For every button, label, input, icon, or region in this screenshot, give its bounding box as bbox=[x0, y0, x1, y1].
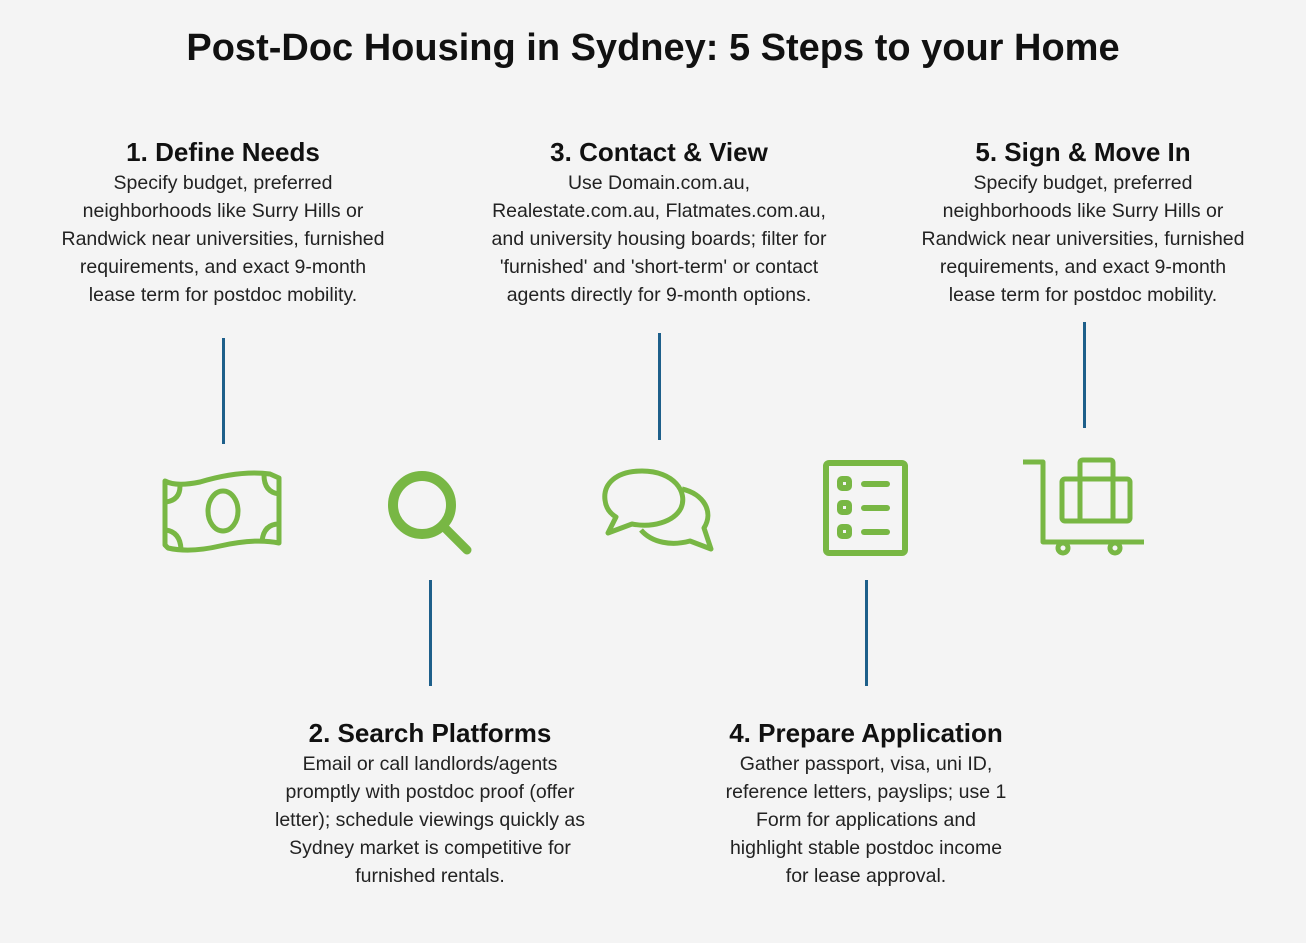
icon: money bbox=[162, 470, 282, 553]
connector 4 bbox=[865, 580, 868, 686]
step 1 text bbox=[62, 137, 384, 306]
step 3 text: Realestate.com.au, Flatmates.com.au, bbox=[492, 200, 826, 222]
step 2 text: promptly with postdoc proof (offer bbox=[285, 781, 575, 803]
step 2 text: 2. Search Platforms bbox=[309, 718, 551, 748]
step 4 text bbox=[726, 718, 1006, 887]
connector 2 bbox=[429, 580, 432, 686]
step 4 text: highlight stable postdoc income bbox=[730, 837, 1002, 859]
step 4 text: for lease approval. bbox=[786, 865, 946, 887]
step 2 text: letter); schedule viewings quickly as bbox=[275, 809, 585, 831]
icon: luggage cart bbox=[1023, 458, 1144, 556]
step 5 text: requirements, and exact 9-month bbox=[940, 256, 1226, 278]
step 5 text: neighborhoods like Surry Hills or bbox=[943, 200, 1223, 222]
icon: chat bubbles bbox=[602, 468, 714, 552]
step 4 text: Form for applications and bbox=[756, 809, 976, 831]
step 1 text: 1. Define Needs bbox=[126, 137, 320, 167]
title: Post-Doc Housing in Sydney: 5 Steps to your Home bbox=[186, 27, 1120, 69]
step 3 text: agents directly for 9-month options. bbox=[507, 284, 811, 306]
connector 5 bbox=[1083, 322, 1086, 428]
step 2 text bbox=[275, 718, 585, 887]
step 2 text: Sydney market is competitive for bbox=[289, 837, 571, 859]
step 4 text: Gather passport, visa, uni ID, bbox=[740, 753, 992, 775]
step 4 text: 4. Prepare Application bbox=[729, 718, 1003, 748]
step 1 text: lease term for postdoc mobility. bbox=[89, 284, 357, 306]
step 3 text: 3. Contact & View bbox=[550, 137, 768, 167]
step 1 text: Specify budget, preferred bbox=[114, 172, 332, 194]
step 5 text: Randwick near universities, furnished bbox=[922, 228, 1244, 250]
step 5 text: Specify budget, preferred bbox=[974, 172, 1192, 194]
step 2 text: Email or call landlords/agents bbox=[303, 753, 557, 775]
step 1 text: Randwick near universities, furnished bbox=[62, 228, 384, 250]
step 2 text: furnished rentals. bbox=[355, 865, 505, 887]
step 1 text: neighborhoods like Surry Hills or bbox=[83, 200, 363, 222]
icon: search bbox=[388, 471, 472, 554]
step 3 text bbox=[492, 137, 826, 306]
step 5 text: lease term for postdoc mobility. bbox=[949, 284, 1217, 306]
step 5 text: 5. Sign & Move In bbox=[975, 137, 1191, 167]
icon: checklist bbox=[823, 460, 908, 556]
step 3 text: Use Domain.com.au, bbox=[568, 172, 750, 194]
step 4 text: reference letters, payslips; use 1 bbox=[726, 781, 1006, 803]
step 1 text: requirements, and exact 9-month bbox=[80, 256, 366, 278]
connector 3 bbox=[658, 333, 661, 440]
step 3 text: 'furnished' and 'short-term' or contact bbox=[500, 256, 818, 278]
step 5 text bbox=[922, 137, 1244, 306]
connector 1 bbox=[222, 338, 225, 444]
step 3 text: and university housing boards; filter for bbox=[492, 228, 826, 250]
